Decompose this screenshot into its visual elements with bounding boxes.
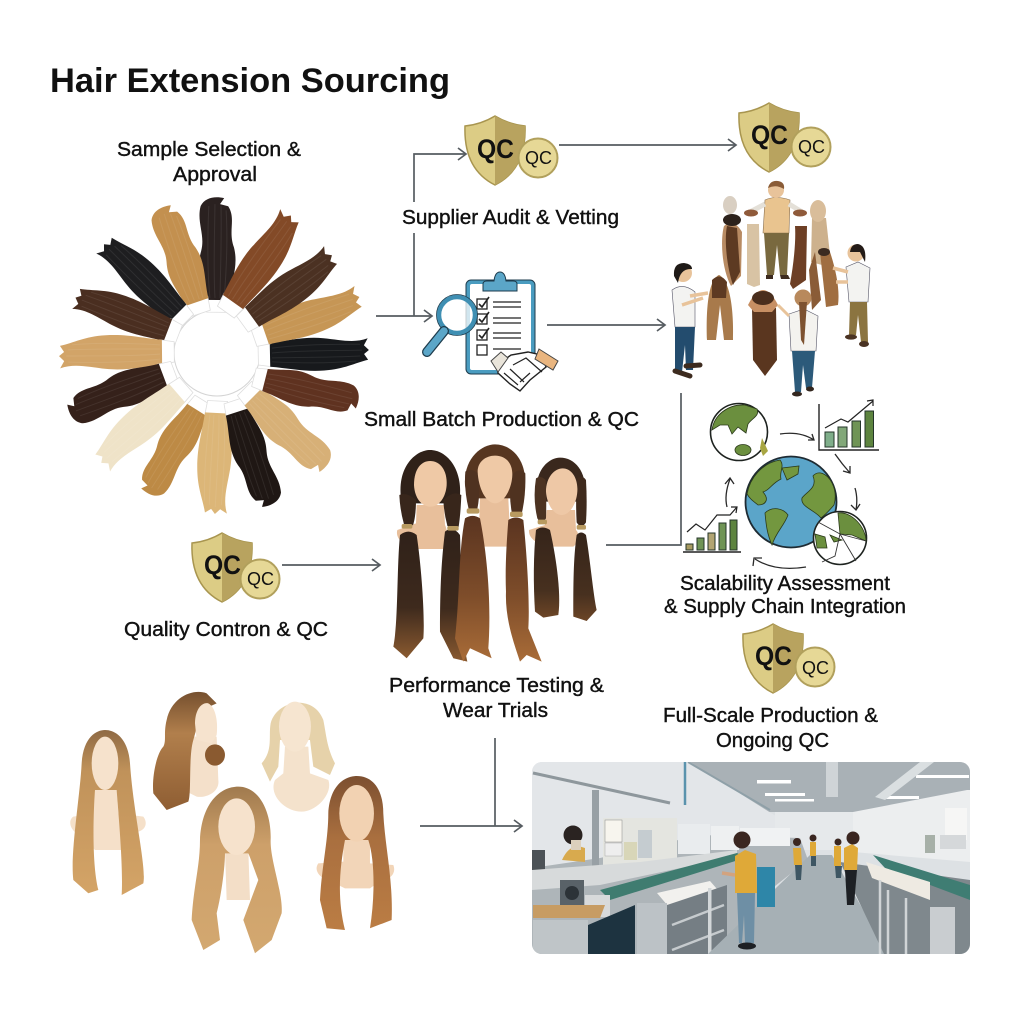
icon: QC badge supplier audit: QC (525, 148, 552, 168)
panel: sample hair swatch wheel (59, 197, 369, 515)
sub: right machine line (840, 790, 970, 954)
heading: sample selection: Sample Selection & (117, 139, 302, 161)
arrow: wheel to audit and checklist (376, 148, 466, 322)
sub: cycle arrows (725, 433, 860, 568)
arrow: quality badge to mannequins (282, 559, 380, 571)
sub: ceiling (532, 762, 970, 850)
sub: wig D (192, 787, 282, 953)
arrow: checklist to evaluators (547, 319, 665, 331)
icon: QC badge supplier audit (465, 116, 558, 185)
sub: worker foreground left (722, 832, 757, 950)
sub: floor (708, 855, 888, 954)
sub: small globe (710, 404, 768, 460)
label: quality control: Quality Contron & QC (124, 619, 328, 641)
illustration: five wig mannequins (70, 692, 394, 953)
icon: QC badge full scale (743, 624, 834, 693)
heading: scalability: Scalability Assessment (680, 573, 890, 595)
heading: full scale production: Full-Scale Production & (663, 705, 879, 727)
sub: hanging hair samples (722, 196, 839, 310)
sub: front person (778, 290, 818, 396)
sub: worker foreground right (844, 832, 860, 905)
arrow: audit badge to top right badge (559, 139, 736, 151)
icon: QC badge top right: QC (798, 137, 825, 157)
sub: far workers (793, 834, 842, 880)
sub: cracked globe (814, 512, 866, 564)
label: small batch: Small Batch Production & QC (364, 409, 639, 431)
sub: blue cart (757, 867, 775, 907)
photo: factory production floor (532, 762, 970, 954)
sub: main globe (746, 456, 836, 548)
sub: left person (672, 263, 733, 376)
heading: scalability: & Supply Chain Integration (664, 596, 906, 618)
title: Hair Extension Sourcing (50, 62, 450, 100)
illustration: global supply chain cycle (683, 400, 879, 568)
illustration: team inspecting hair samples (672, 181, 870, 396)
heading: scalability (664, 573, 906, 618)
sub: right person (833, 244, 870, 347)
icon: QC badge full scale: QC (802, 658, 829, 678)
icon: clipboard with magnifier and handshake (427, 272, 558, 391)
arrow: wigs and trials to factory (420, 738, 522, 832)
icon: QC badge supplier audit: QC (477, 134, 514, 164)
sub: left machine line (532, 790, 808, 954)
heading: sample selection (117, 139, 302, 186)
icon: QC badge quality control (192, 533, 280, 602)
sub: bottom bar chart (683, 507, 741, 552)
icon: QC badge top right: QC (751, 120, 788, 150)
sub: left worker at station (562, 826, 585, 862)
illustration: braided mannequins (393, 444, 597, 662)
sub: left mannequin (393, 450, 467, 662)
icon: QC badge top right (739, 103, 830, 172)
icon: QC badge quality control: QC (247, 569, 274, 589)
heading: full scale production: Ongoing QC (716, 730, 829, 752)
heading: full scale production (663, 705, 879, 752)
icon: QC badge quality control: QC (204, 550, 241, 580)
icon: QC badge full scale: QC (755, 641, 792, 671)
sub: centre person (744, 181, 807, 279)
label: supplier audit: Supplier Audit & Vetting (402, 207, 619, 229)
sub: wig B (153, 692, 225, 810)
arrow: trials to scalability (606, 393, 681, 545)
sub: top bar chart (819, 400, 879, 450)
sub: centre hair sample (748, 290, 778, 376)
heading: sample selection: Approval (173, 164, 257, 186)
sub: right mannequin (529, 458, 597, 621)
sub: wig C (262, 702, 335, 812)
sub: wig A (70, 730, 146, 895)
heading: performance testing: Performance Testing & (389, 675, 605, 697)
sub: centre mannequin (455, 444, 542, 662)
sub: wig E (317, 776, 394, 930)
heading: performance testing: Wear Trials (443, 700, 548, 722)
heading: performance testing (389, 675, 605, 722)
